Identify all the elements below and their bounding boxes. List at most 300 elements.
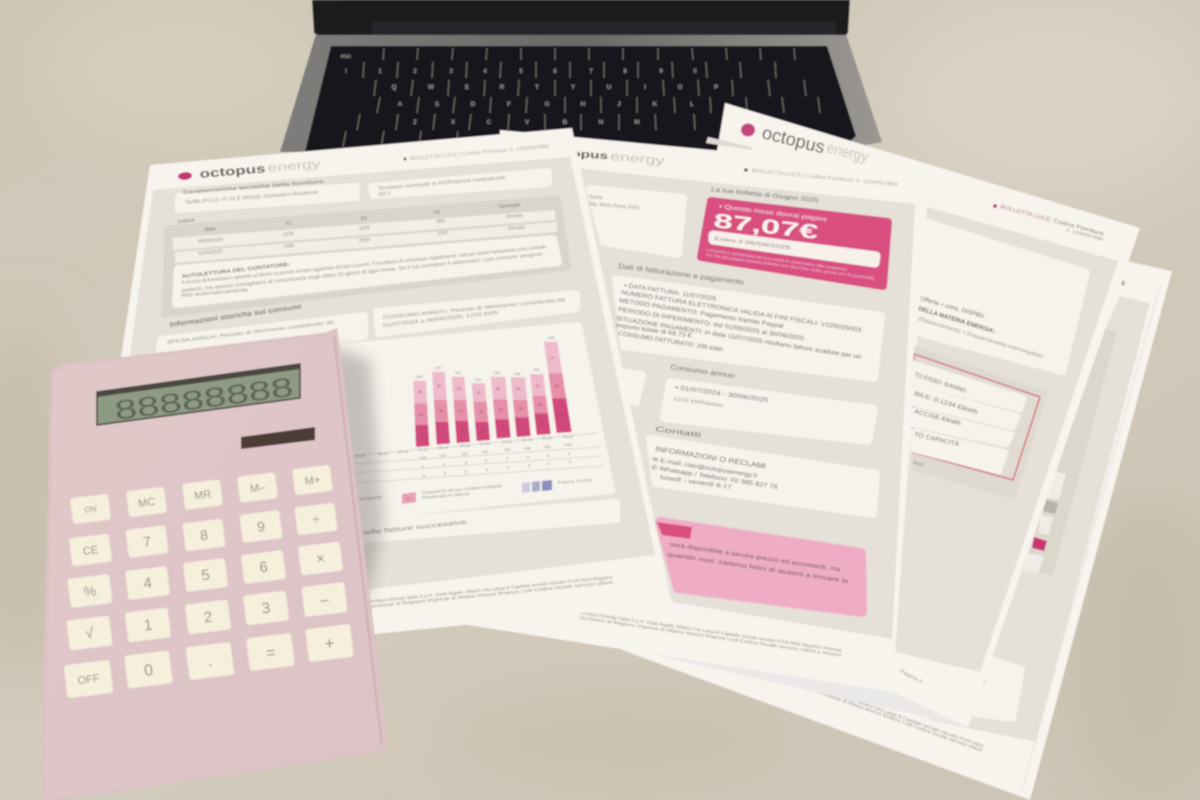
key legends: I [644, 84, 646, 91]
laptop [280, 0, 882, 152]
key legends: T [535, 84, 539, 91]
small hidden card [622, 372, 642, 402]
page C: right sheet [633, 103, 1140, 727]
box [701, 201, 888, 286]
contacts text: ✆ Whatsapp / Telefono: 02 385 827 76 [651, 464, 779, 491]
month labels: 09-24 [460, 443, 471, 448]
key gaps [343, 48, 820, 147]
segment values: 46 [520, 425, 524, 429]
readings table: 1145 [437, 230, 448, 237]
segment values: 56 [440, 431, 444, 435]
calculator shadow [328, 345, 384, 600]
box tab [657, 522, 692, 539]
tariff labels [913, 372, 978, 448]
voltage text [378, 175, 506, 198]
sheet paper [110, 128, 672, 634]
keypad: 6 [258, 559, 269, 576]
card text: Tel. [978, 678, 987, 686]
bar totals: 144 [475, 377, 482, 382]
key legends: Q [391, 84, 397, 91]
count rows: 9 [443, 462, 446, 467]
contacts heading: Contatti [655, 426, 702, 440]
key legends: B [563, 119, 568, 126]
month labels: 02-25 [563, 434, 574, 439]
key legends: 8 [623, 68, 627, 75]
totals row: 245 [565, 442, 572, 447]
sheet paper [633, 103, 1140, 727]
self-reading text: letti automaticamente [182, 287, 248, 299]
keypad: 3 [261, 600, 271, 617]
chart legend: Consumi F1 dai tuoi contatori e fatturati [422, 483, 502, 495]
chart legend: Ricalcolati in fattura [422, 491, 471, 500]
count rows: 9 [422, 464, 425, 469]
small note [706, 247, 876, 281]
month labels: 08-24 [438, 445, 449, 450]
segment values: 69 [555, 384, 559, 388]
chart card [336, 326, 611, 517]
tariff labels: BILE: 0,1234 €/kWh [913, 391, 978, 416]
billing heading: Dati di fatturazione e pagamento [618, 263, 745, 287]
readings table: 1589 [283, 243, 294, 250]
self-reading text [182, 244, 547, 299]
pink outlined box [912, 354, 1040, 480]
card text: Offerta + cons. DISPBD [919, 296, 985, 320]
top segments [413, 342, 562, 403]
sheet footer text: Octopus Energy Italia S.p.A. Sede legale: Milano Via Larga 8 Capitale sociale versato P.IVA REA Registro Imprese [580, 610, 842, 653]
chart legend: Consumi [355, 495, 382, 503]
amount heading: ▪ Questo mese dovrai pagare [719, 204, 829, 223]
key legends: A [398, 101, 403, 108]
count rows: 9 [547, 453, 550, 458]
keypad: 4 [142, 575, 153, 592]
key legends: H [581, 101, 586, 108]
page D: back sheet [622, 258, 1172, 800]
supply label: BOLLETTA LUCE [999, 204, 1052, 223]
readings table: 890 [437, 218, 446, 225]
key legends: N [599, 119, 604, 126]
bill month heading: La tua bolletta di Giugno 2025 [711, 187, 820, 204]
readings table: 1234 [283, 231, 294, 238]
key legends: 1 [378, 68, 382, 75]
annual consumption text: 1232 kWh/anno [673, 396, 723, 409]
count rows: 9 [465, 460, 468, 465]
segment values: 48 [439, 409, 443, 413]
chart legend [355, 477, 593, 504]
table rows [173, 210, 555, 250]
small note: L'importo è addebitato sul tuo conto in automatico alla scadenza [706, 247, 848, 272]
calculator [43, 330, 386, 800]
sheet heading: 25 [1118, 280, 1126, 288]
bar totals: 245 [548, 335, 555, 340]
sheet grey panel [930, 296, 1150, 742]
totals row: 148 [524, 446, 531, 450]
key legends: Y [571, 84, 576, 91]
key legends: S [435, 101, 440, 108]
due date pill [713, 235, 876, 263]
sheet footer text: Octopus Energy Italia S.p.A. Sede legale: Milano Via Larga 8 Capitale sociale versato P.IVA REA Registro [368, 575, 613, 604]
calculator display: 88888888 [113, 372, 295, 426]
readings table [173, 202, 557, 263]
key legends: R [500, 84, 505, 91]
octopus logo: octopus [548, 147, 609, 162]
card text: DELLA MATERIA ENERGIA: [917, 306, 996, 335]
sheet footer text [368, 575, 613, 609]
keypad: ON [84, 504, 97, 515]
keypad: + [323, 633, 336, 654]
keyboard well [305, 46, 856, 152]
octopus logo: octopus [199, 161, 266, 181]
key legends: 9 [659, 68, 663, 75]
annual consumption text [383, 297, 566, 329]
key legends: F [507, 101, 511, 108]
calculator body [43, 330, 386, 800]
billing details [616, 283, 862, 361]
key legends: 7 [589, 68, 593, 75]
billing details: SITUAZIONE PAGAMENTI: in data 15/07/2025 risultano fatture scadute per un [616, 316, 862, 361]
pink amount box [701, 201, 888, 286]
segment values: 49 [519, 407, 523, 411]
keypad: M+ [304, 474, 321, 488]
technical text [183, 179, 324, 206]
totals row: 151 [462, 451, 469, 456]
tariff labels: TO CAPACITÀ [914, 431, 960, 448]
tariff panel [912, 345, 1048, 500]
page A: left sheet with consumption chart [110, 128, 672, 634]
segment values: 44 [480, 430, 484, 434]
card text [917, 296, 1044, 360]
keypad: = [265, 644, 276, 662]
bar totals: 155 [416, 374, 423, 379]
count rows: 5 [569, 459, 572, 464]
totals row: 155 [420, 455, 427, 460]
history heading: Informazioni storiche sui consumi [169, 304, 302, 329]
sheet footer text: Iscrizione al Registro Imprese di Milano Monza Brianza Lodi Codice fiscale servizio clienti [770, 672, 983, 753]
readings table: Tipologia [498, 202, 520, 210]
box [660, 522, 862, 612]
tariff pills [913, 363, 1024, 472]
key legends: D [471, 101, 476, 108]
octopus logo [548, 147, 665, 168]
middle segments [414, 373, 566, 425]
key legends: esc [341, 53, 352, 60]
segment values: 50 [420, 434, 424, 438]
month labels: 05-24 [378, 451, 389, 456]
month labels: 06-24 [398, 449, 409, 454]
bar totals: 153 [494, 370, 501, 375]
self-reading text: AUTOLETTURA DEL CONTATORE: [182, 262, 291, 280]
contacts text: lunedì - venerdì 9-17 [660, 475, 733, 491]
annual consumption card [664, 382, 874, 441]
segment values: 48 [479, 410, 483, 414]
octopus logo: energy [610, 149, 665, 168]
table lines [350, 433, 603, 483]
keypad [64, 465, 354, 698]
keypad: 0 [143, 662, 154, 680]
bar totals: 167 [435, 365, 442, 370]
keypad: 5 [200, 567, 211, 584]
count rows: 5 [528, 463, 531, 468]
segment values: 101 [558, 414, 564, 418]
card text: (Dispacciamento) + (Dispacciamento interrompibile) [917, 316, 1044, 360]
calculator display [97, 364, 300, 426]
keypad: MC [137, 496, 156, 510]
segment values: 59 [457, 387, 461, 391]
billing details: CONSUMO FATTURATO: 205 kWh [618, 331, 723, 354]
table heading: Letture [178, 218, 195, 225]
readings table: F3 [434, 209, 440, 216]
page B: centre sheet [468, 130, 925, 692]
octopus logo: energy [825, 139, 870, 166]
keypad: 2 [203, 609, 213, 626]
segment values: 51 [499, 408, 503, 412]
totals row: 144 [482, 449, 489, 454]
annual consumption heading: Consumo annuo [670, 364, 735, 380]
supply label: BOLLETTA LUCE | Codice Fornitura: n. 1234567890 [752, 168, 898, 188]
count rows [422, 451, 572, 478]
bar totals: 151 [455, 370, 462, 375]
self-reading text: Il servizio di Autolettura è garantito al cliente su periodo sempre aggiornato dei tuoi consumi. Ti ricordiamo di comunicare regolarmente i dati per tenere l'andamento sotto controllo [182, 244, 547, 286]
segment values [418, 356, 564, 438]
calculator right edge [334, 336, 382, 745]
technical text: Tariffa (P.O.D. IT 01 E 00016): Domestico Residente [185, 189, 319, 206]
stacked bar chart [350, 335, 603, 504]
bar totals: 148 [514, 371, 521, 376]
sheet footer text: Pagina 2 [900, 668, 924, 684]
voltage card [372, 172, 548, 195]
sheet inner chart panel [1023, 325, 1117, 575]
month labels: 07-24 [418, 447, 429, 452]
tariff note: Note [913, 460, 924, 469]
contacts text [651, 446, 779, 491]
key legends: J [617, 101, 621, 108]
segment values: 55 [496, 387, 500, 391]
count rows: 5 [486, 467, 489, 472]
readings table: Data [205, 226, 216, 233]
sheet footer text: Iscrizione al Registro Imprese di Milano Monza Brianza Lodi Codice fiscale servizio clienti [368, 580, 613, 609]
keypad: ÷ [311, 511, 321, 527]
key legends: Z [413, 119, 417, 126]
octopus logo: octopus [760, 122, 827, 157]
annual spend card [159, 316, 364, 360]
keypad: M– [249, 481, 267, 495]
annual consumption text: 01/07/2024 a 30/06/2025: 1232 kWh [383, 310, 499, 329]
key legends: M [634, 119, 640, 126]
readings table: Stimata [508, 225, 525, 232]
segment values: 55 [418, 390, 422, 394]
meter readings panel [164, 198, 569, 315]
tariff labels: ACCISE €/kWh [913, 409, 961, 427]
white info card [917, 222, 1086, 371]
sheet paper [622, 258, 1172, 800]
key legends: \ [345, 68, 347, 75]
customer text: Nome [589, 194, 603, 201]
sheet edge line [1022, 285, 1160, 790]
keypad: √ [84, 624, 95, 642]
key legends: U [607, 84, 612, 91]
key legends: E [465, 84, 470, 91]
billing details: PERIODO DI RIFERIMENTO: dal 01/06/2025 al 30/06/2025 [618, 307, 805, 343]
sheet bottom card [975, 660, 1021, 718]
count rows: 5 [423, 473, 426, 478]
count rows: 9 [527, 454, 530, 460]
voltage text: 220 V [378, 191, 392, 198]
key legends: V [525, 119, 530, 126]
laptop deck [280, 34, 882, 152]
supply label: BOLLETTA LUCE | Codice Fornitura: n. 1234567890 [410, 144, 550, 162]
supply label: n. 1234567890 [1066, 227, 1104, 242]
key legends: W [428, 84, 435, 91]
segment values: 43 [460, 430, 464, 434]
sheet lower fold [633, 650, 968, 727]
white customer card [590, 189, 683, 254]
box text: sarà disponibile a servire prezzo ed accostanti, ma [670, 542, 842, 574]
supply label [744, 168, 898, 188]
count rows: 5 [548, 461, 551, 466]
key legends: C [487, 119, 492, 126]
small note: Se hai già pagato questa bolletta non devi fare nulla, grazie per la puntualità [706, 252, 876, 281]
sheet footer text: Octopus Energy Italia S.p.A. Sede legale: Milano Via Larga 8 Capitale sociale versato P.IVA REA [760, 664, 984, 749]
technical text: Caratteristiche tecniche della fornitura [183, 179, 324, 196]
keypad: – [319, 591, 330, 609]
segment values: 52 [477, 391, 481, 395]
key legends: G [544, 101, 550, 108]
key legends: 2 [413, 68, 417, 75]
voltage text: Tensione nominale in kV/Potenza contrattuale [378, 175, 506, 192]
segment values: 47 [501, 427, 505, 431]
key legends: O [677, 84, 683, 91]
key legends: 3 [449, 68, 453, 75]
table values: 30/06/2024 [198, 237, 223, 245]
sheet grey panel [125, 157, 655, 590]
meter self-reading card [176, 239, 558, 304]
bar totals [416, 335, 555, 382]
readings table: F1 [286, 220, 292, 227]
chart legend: F1 [407, 497, 411, 501]
laptop screen bezel [312, 0, 850, 35]
pink support box: quando vuoi: saremo felici di aiutarti a trovare la [667, 552, 850, 585]
amount: 87,07€ [712, 210, 819, 244]
count rows: 5 [465, 469, 468, 474]
annual consumption text: ▪ 01/07/2024 - 30/06/2025 [675, 385, 770, 404]
contacts card [650, 439, 876, 514]
month labels: 12-24 [522, 437, 533, 442]
sheet footer text [580, 610, 842, 658]
keypad: . [207, 653, 213, 670]
month labels: 01-25 [542, 436, 553, 440]
key legends: 4 [483, 68, 487, 75]
pink support box [657, 522, 862, 612]
totals row: 153 [504, 447, 511, 452]
key legends [341, 53, 719, 126]
keypad: 8 [199, 527, 209, 543]
keypad: 1 [143, 617, 153, 634]
key legends: 5 [519, 68, 523, 75]
keypad: 9 [256, 518, 266, 535]
count rows: 9 [485, 458, 488, 463]
segment values: 50 [538, 403, 542, 407]
grey header strip [706, 137, 752, 150]
segment values: 53 [516, 387, 520, 391]
key legends: L [690, 101, 694, 108]
month labels: 11-24 [502, 439, 513, 444]
segment values: 48 [540, 422, 544, 426]
totals row [420, 442, 572, 460]
sheet footer text: Iscrizione al Registro Imprese di Milano Monza Brianza Lodi Codice fiscale servizio clienti e reclami [580, 615, 842, 658]
customer text: Sig. Mario Rossi 2024 [589, 201, 639, 211]
key legends: P [714, 84, 719, 91]
keypad: 7 [142, 533, 152, 550]
supply label [993, 204, 1105, 242]
tariff labels: TO FISSO: €/ANNO [913, 372, 967, 395]
billing details: importo totale di 69,73 € [616, 323, 693, 340]
key legends: 0 [693, 68, 697, 75]
count rows: 5 [507, 465, 510, 470]
count rows: 5 [444, 471, 447, 476]
next bills text: nelle fatture successive. [360, 519, 470, 537]
octopus logo [178, 156, 321, 181]
customer text [589, 194, 639, 211]
annual consumption card [377, 294, 576, 333]
count rows: 9 [506, 456, 509, 461]
sheet grey panel [895, 207, 1118, 672]
due date: Entro il 06/08/2025 [714, 236, 791, 251]
key legends: X [451, 119, 456, 126]
segment values: 49 [459, 409, 463, 413]
supply label: Codice Fornitura [1052, 218, 1105, 238]
bar totals: 158 [533, 367, 540, 372]
keypad: MR [193, 488, 212, 502]
chart cells [1023, 470, 1066, 574]
totals row: 158 [544, 444, 551, 449]
next bills card [362, 503, 616, 539]
month labels: 10-24 [480, 441, 491, 446]
billing details: ▪ DATA FATTURA: 11/07/2025 [624, 283, 717, 303]
keypad: % [83, 582, 97, 600]
count rows: 9 [568, 451, 571, 456]
segment values: 63 [437, 384, 441, 388]
key legends: 6 [553, 68, 557, 75]
contacts text: ✉ E-mail: ciao@octopusenergy.it [652, 457, 758, 480]
readings table: F2 [361, 215, 367, 222]
technical card [179, 187, 356, 209]
sheet grey panel [560, 168, 915, 639]
billing card [616, 279, 881, 378]
segment values: 50 [419, 413, 423, 417]
keypad: × [315, 550, 326, 568]
octopus logo: energy [267, 156, 321, 175]
annual consumption text: CONSUMO ANNUO: Periodo di riferimento considerato da [383, 297, 566, 321]
key legends: K [653, 101, 658, 108]
keypad: CE [82, 544, 99, 558]
self-reading text: preferiti, ma spesso consigliamo di comunicarla negli ultimi 10 giorni di ogni mese. Se il tuo contatore è elettronico i tuoi consumi vengono [182, 251, 543, 294]
chart legend: Fasce orarie [558, 477, 593, 485]
segment values: 60 [536, 384, 540, 388]
annual spend text: SPESA ANNUA: Periodo di riferimento considerato da [167, 320, 334, 346]
sheet paper [468, 130, 925, 692]
bottom segments [415, 398, 572, 447]
month labels [355, 434, 574, 458]
billing details: NUMERO FATTURA ELETTRONICA VALIDA AI FINI FISCALI: V225025003 [621, 290, 862, 334]
keypad: OFF [77, 673, 101, 687]
octopus logo [741, 122, 870, 166]
readings table: 31/03/2025 [198, 249, 223, 257]
month labels: 04-24 [355, 453, 366, 458]
solar panel [241, 427, 315, 449]
readings table: 1876 [359, 225, 370, 232]
readings table: 2034 [359, 237, 370, 244]
contacts text: INFORMAZIONI O RECLAMI [655, 446, 766, 471]
segment values: 75 [550, 356, 554, 360]
